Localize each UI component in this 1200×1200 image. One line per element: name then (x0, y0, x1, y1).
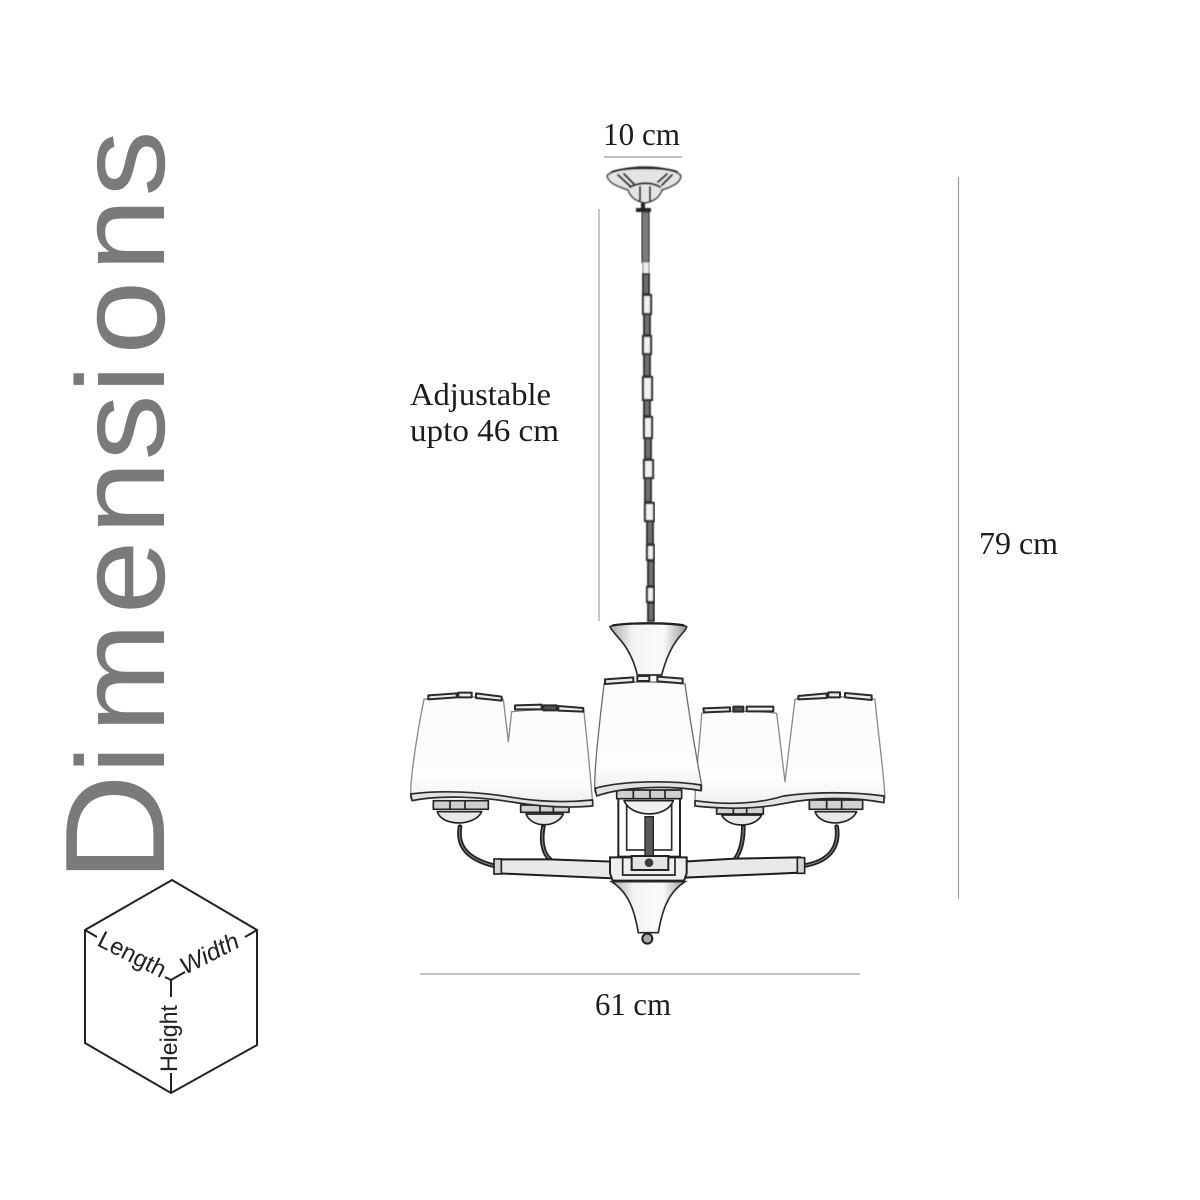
curved arms (459, 827, 837, 866)
lampshades: right pair (695, 697, 885, 806)
icon: dimensions cube: Length (93, 926, 171, 983)
label: adjustable height: upto 46 cm (410, 412, 559, 448)
arm bars (494, 857, 805, 878)
lampshades: left pair (411, 697, 593, 805)
label: canopy width: 10 cm (603, 116, 680, 152)
title: Dimensions: imensions (51, 130, 191, 774)
lower finial (612, 882, 685, 933)
centre frame and post (610, 798, 687, 881)
icon: dimensions cube (85, 880, 257, 1093)
label: adjustable height: Adjustable (410, 376, 551, 412)
icon: dimensions cube: Width (175, 928, 244, 980)
label: adjustable height (410, 209, 599, 621)
title: Dimensions: D (37, 774, 195, 882)
label: total width: 61 cm (595, 986, 671, 1022)
illustration: suspension rod and chain (642, 212, 654, 621)
illustration: ceiling canopy (607, 167, 681, 212)
illustration: chandelier body (411, 623, 885, 944)
upper bell (610, 623, 687, 675)
icon: dimensions cube: Height (156, 1005, 183, 1072)
lampshade: centre (595, 682, 702, 792)
label: total height: 79 cm (979, 525, 1058, 561)
lamp holders (433, 790, 863, 825)
